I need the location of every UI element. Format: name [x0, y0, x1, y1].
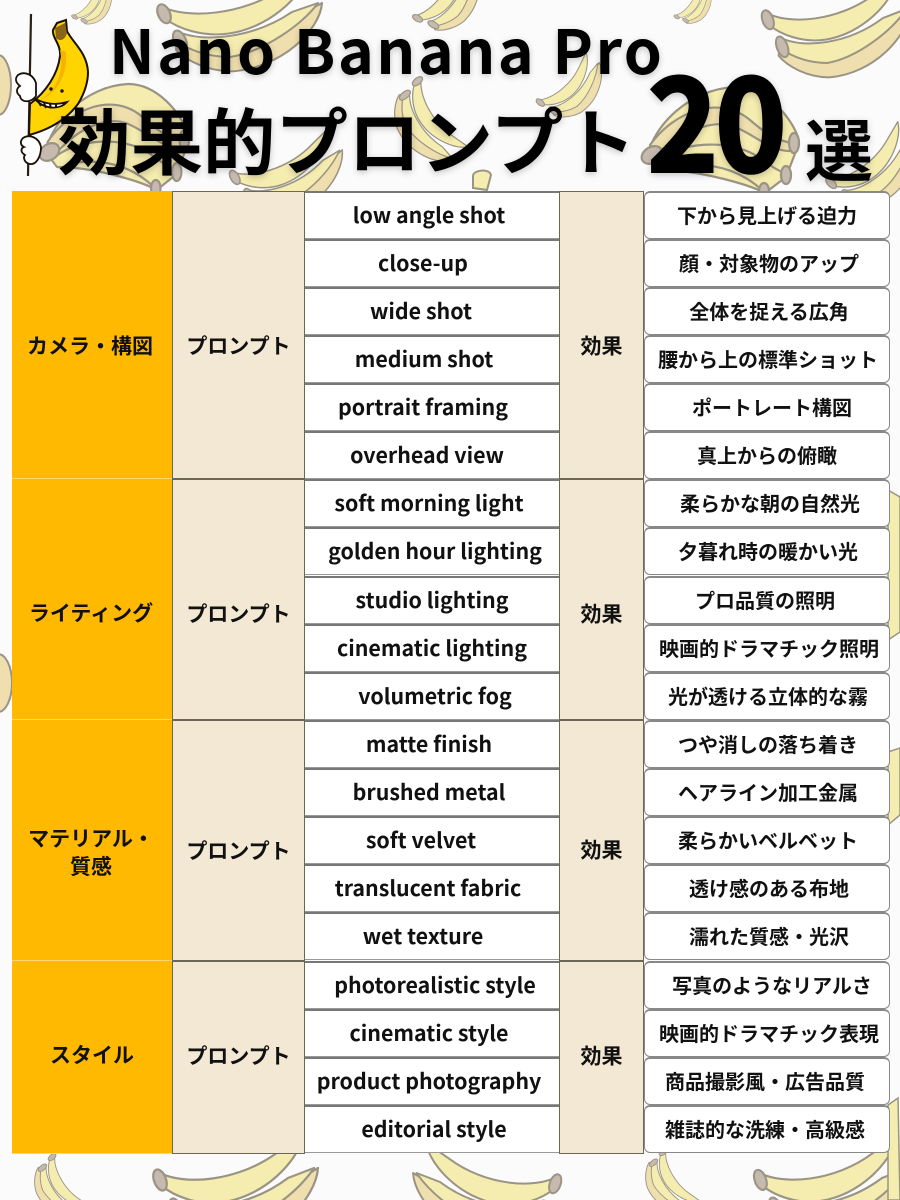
effect cell [644, 239, 890, 287]
effect cell [644, 912, 890, 960]
prompt cell [305, 961, 559, 1009]
effect cell: プロ品質の照明 [695, 584, 835, 614]
prompt cell: cinematic style [350, 1017, 508, 1048]
label: プロンプト camera [172, 191, 305, 479]
effect cell [644, 864, 890, 912]
icon: banana mascot [15, 14, 89, 176]
effect cell [644, 1105, 890, 1153]
label: 効果 camera [559, 191, 644, 479]
prompt cell [305, 431, 559, 479]
label: プロンプト lighting [172, 479, 305, 720]
prompt cell [305, 1057, 559, 1105]
effect cell: 商品撮影風・広告品質 [665, 1066, 865, 1094]
label: 効果 material: 効果 [580, 834, 622, 864]
prompt cell: photorealistic style [334, 969, 536, 1000]
prompt cell: editorial style [361, 1113, 507, 1144]
prompt cell [305, 335, 559, 383]
effect cell [644, 479, 890, 527]
prompt cell [305, 720, 559, 768]
label: 効果 style [559, 961, 644, 1154]
prompt cell: brushed metal [353, 776, 505, 807]
effect cell [644, 1057, 890, 1105]
prompt cell [305, 239, 559, 287]
prompt cell: soft morning light [334, 487, 524, 518]
prompt cell: wet texture [363, 920, 483, 951]
prompt cell [305, 768, 559, 816]
panel: スタイル: スタイル [50, 1039, 134, 1069]
effect cell: 全体を捉える広角 [689, 296, 849, 324]
prompt cell: low angle shot [353, 199, 505, 230]
label: 効果 material [559, 720, 644, 961]
prompt cell [305, 576, 559, 624]
label: 効果 style: 効果 [580, 1040, 622, 1070]
prompt cell [305, 672, 559, 720]
prompt cell [305, 191, 559, 239]
prompt cell: cinematic lighting [337, 632, 527, 663]
prompt cell [305, 527, 559, 575]
effect cell: 透け感のある布地 [689, 872, 849, 902]
prompt cell [305, 912, 559, 960]
effect cell [644, 961, 890, 1009]
effect cell [644, 576, 890, 624]
prompt cell: medium shot [355, 343, 493, 374]
label: 効果 lighting [559, 479, 644, 720]
effect cell [644, 383, 890, 431]
effect cell [644, 768, 890, 816]
effect cell: 写真のようなリアルさ [672, 970, 872, 998]
effect cell [644, 287, 890, 335]
panel: マテリアル・質感: マテリアル・ [28, 823, 154, 853]
effect cell [644, 816, 890, 864]
prompt cell: close-up [378, 247, 468, 278]
effect cell: 下から見上げる迫力 [677, 200, 857, 228]
label: プロンプト camera: プロンプト [186, 330, 291, 360]
effect cell: 柔らかな朝の自然光 [680, 488, 860, 516]
effect cell: ヘアライン加工金属 [678, 776, 858, 806]
effect cell: 映画的ドラマチック照明 [659, 632, 879, 662]
effect cell: 濡れた質感・光沢 [689, 920, 849, 950]
effect cell: つや消しの落ち着き [678, 728, 858, 758]
effect cell [644, 624, 890, 672]
prompt cell: overhead view [350, 439, 504, 470]
effect cell [644, 335, 890, 383]
prompt cell: volumetric fog [358, 680, 512, 711]
label: プロンプト material [172, 720, 305, 961]
effect cell [644, 431, 890, 479]
prompt cell: portrait framing [338, 391, 508, 422]
title: 選: 選 [805, 97, 873, 196]
effect cell: 腰から上の標準ショット [658, 344, 878, 372]
effect cell [644, 720, 890, 768]
effect cell: 顔・対象物のアップ [679, 248, 859, 276]
effect cell [644, 191, 890, 239]
effect cell: 雑誌的な洗練・高級感 [665, 1114, 865, 1142]
panel: ライティング: ライティング [29, 597, 153, 627]
prompt cell: wide shot [370, 295, 472, 326]
label: 効果 lighting: 効果 [580, 598, 622, 628]
effect cell [644, 1009, 890, 1057]
prompt cell [305, 864, 559, 912]
effect cell [644, 672, 890, 720]
prompt cell [305, 816, 559, 864]
panel: マテリアル・質感 [12, 720, 172, 961]
prompt cell [305, 1105, 559, 1153]
prompt cell: translucent fabric [335, 872, 521, 903]
panel: カメラ・構図: カメラ・構図 [27, 330, 153, 360]
prompt cell [305, 287, 559, 335]
prompt cell [305, 1009, 559, 1057]
prompt cell: product photography [317, 1065, 541, 1096]
prompt cell: soft velvet [366, 824, 476, 855]
title: Nano Banana Pro: Nano Banana Pro [109, 3, 664, 92]
prompt cell: matte finish [366, 728, 492, 759]
panel: マテリアル・質感: 質感 [70, 851, 112, 881]
effect cell: ポートレート構図 [692, 392, 852, 420]
effect cell [644, 527, 890, 575]
title: 効果的プロンプト: 効果的プロンプト [58, 85, 636, 190]
label: プロンプト material: プロンプト [186, 835, 291, 865]
effect cell: 柔らかいベルベット [678, 824, 858, 854]
effect cell: 夕暮れ時の暖かい光 [678, 536, 858, 564]
title: 20: 20 [646, 23, 782, 211]
panel: カメラ・構図 [12, 191, 172, 479]
prompt cell [305, 624, 559, 672]
panel: スタイル [12, 961, 172, 1154]
effect cell: 光が透ける立体的な霧 [668, 680, 868, 710]
effect cell: 映画的ドラマチック表現 [659, 1018, 879, 1046]
label: プロンプト style: プロンプト [186, 1040, 291, 1070]
prompt cell: studio lighting [356, 584, 508, 615]
label: 効果 camera: 効果 [580, 330, 622, 360]
label: プロンプト style [172, 961, 305, 1154]
panel: ライティング [12, 479, 172, 720]
effect cell: 真上からの俯瞰 [697, 440, 837, 468]
label: プロンプト lighting: プロンプト [186, 598, 291, 628]
prompt cell: golden hour lighting [328, 535, 542, 566]
prompt cell [305, 383, 559, 431]
prompt cell [305, 479, 559, 527]
